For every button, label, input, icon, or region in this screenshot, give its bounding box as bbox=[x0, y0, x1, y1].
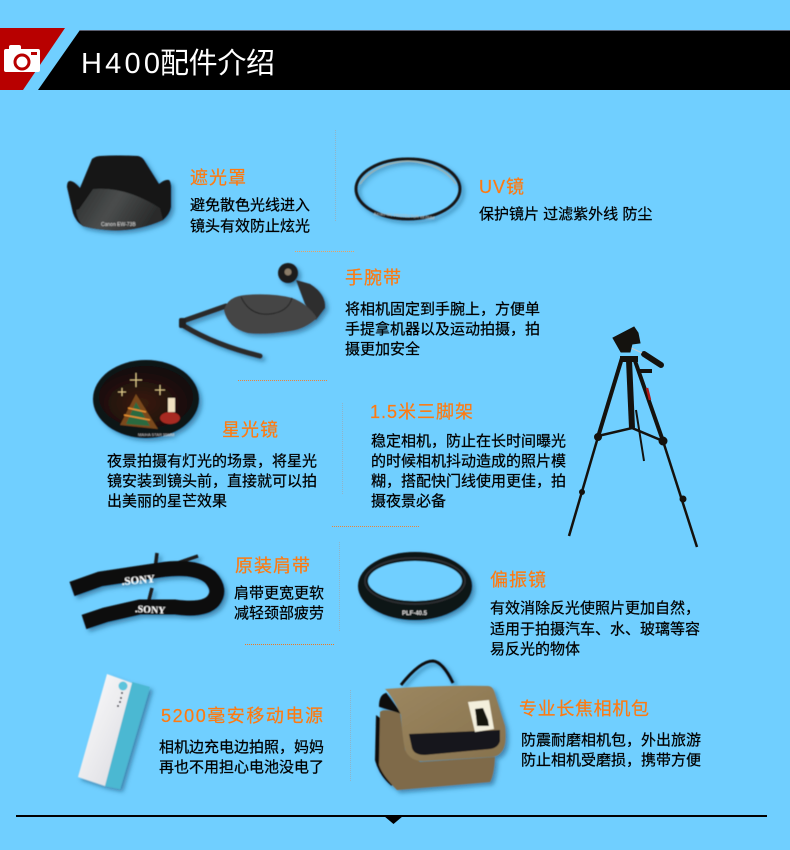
icon: star filter bbox=[93, 360, 199, 438]
text block: 糊，搭配快门线使用更佳，拍 bbox=[371, 473, 566, 490]
text block: 的时候相机抖动造成的照片模 bbox=[371, 453, 566, 470]
panel: lens hood bbox=[67, 156, 310, 235]
icon: lens hood: Canon EW-73B bbox=[101, 222, 136, 228]
icon: Sony strap: .SONY bbox=[121, 573, 156, 588]
text block: 镜头有效防止炫光 bbox=[190, 217, 310, 235]
panel: shoulder strap bbox=[72, 553, 324, 622]
heading: 偏振镜 bbox=[490, 570, 547, 590]
text block: 防震耐磨相机包，外出旅游 bbox=[521, 732, 701, 749]
heading: 星光镜 bbox=[222, 420, 279, 440]
heading: 原装肩带 bbox=[235, 556, 311, 576]
icon: star filter: MAIHA STAR 55MM bbox=[138, 432, 174, 437]
panel: power bank bbox=[78, 674, 324, 789]
text block: 将相机固定到手腕上，方便单 bbox=[345, 301, 540, 318]
icon: camera bag bbox=[376, 661, 506, 790]
heading: 遮光罩 bbox=[190, 168, 247, 188]
icon: Sony strap: .SONY bbox=[135, 604, 166, 617]
heading: 1.5米三脚架 bbox=[370, 402, 474, 422]
icon: UV ring: Kenko MC PROTECTOR 49.0MM bbox=[374, 211, 435, 220]
heading: 5200毫安移动电源 bbox=[161, 706, 324, 726]
icon: polarizer ring bbox=[358, 552, 472, 620]
icon: lens hood bbox=[67, 156, 171, 230]
text block: 防止相机受磨损，携带方便 bbox=[521, 752, 701, 769]
black title band bbox=[38, 30, 790, 90]
text block: 保护镜片 过滤紫外线 防尘 bbox=[479, 205, 652, 223]
icon: Sony strap bbox=[72, 553, 217, 622]
text block: 减轻颈部疲劳 bbox=[234, 605, 324, 622]
icon: polarizer ring: PLF-40.5 bbox=[402, 611, 428, 617]
text block: 有效消除反光使照片更加自然， bbox=[490, 600, 700, 617]
panel: UV filter bbox=[356, 159, 652, 223]
text block: 出美丽的星芒效果 bbox=[107, 493, 227, 510]
footer line with arrow bbox=[16, 815, 767, 824]
header bar bbox=[0, 28, 790, 90]
text block: 稳定相机，防止在长时间曝光 bbox=[371, 433, 566, 450]
text block: 手提拿机器以及运动拍摄，拍 bbox=[345, 320, 540, 338]
heading: 手腕带 bbox=[345, 268, 402, 288]
panel: polarizer bbox=[358, 552, 700, 658]
text block: 摄更加安全 bbox=[345, 340, 420, 358]
icon: tripod bbox=[569, 327, 697, 547]
title: 配件介绍 bbox=[160, 47, 275, 80]
heading: 专业长焦相机包 bbox=[519, 699, 650, 719]
text block: 夜景拍摄有灯光的场景，将星光 bbox=[107, 453, 317, 470]
text block: 再也不用担心电池没电了 bbox=[159, 759, 324, 776]
icon: power bank bbox=[78, 674, 150, 789]
text block: 镜安装到镜头前，直接就可以拍 bbox=[107, 472, 317, 490]
divider lines bbox=[238, 130, 420, 782]
text block: 摄夜景必备 bbox=[371, 493, 446, 510]
panel: wrist strap bbox=[179, 263, 540, 358]
panel: camera bag bbox=[376, 661, 701, 790]
red camera tab bbox=[0, 28, 65, 90]
panel: star filter bbox=[93, 360, 317, 510]
text block: 避免散色光线进入 bbox=[190, 197, 310, 214]
title: H400 bbox=[81, 48, 160, 80]
icon: camera bbox=[4, 45, 40, 72]
icon: wrist strap bbox=[179, 263, 325, 356]
text block: 相机边充电边拍照，妈妈 bbox=[159, 739, 324, 756]
panel: tripod bbox=[370, 327, 697, 547]
text block: 适用于拍摄汽车、水、玻璃等容 bbox=[490, 620, 700, 638]
text block: 易反光的物体 bbox=[490, 641, 580, 658]
text block: 肩带更宽更软 bbox=[234, 585, 324, 602]
heading: UV镜 bbox=[479, 177, 525, 197]
icon: UV ring bbox=[356, 159, 460, 220]
